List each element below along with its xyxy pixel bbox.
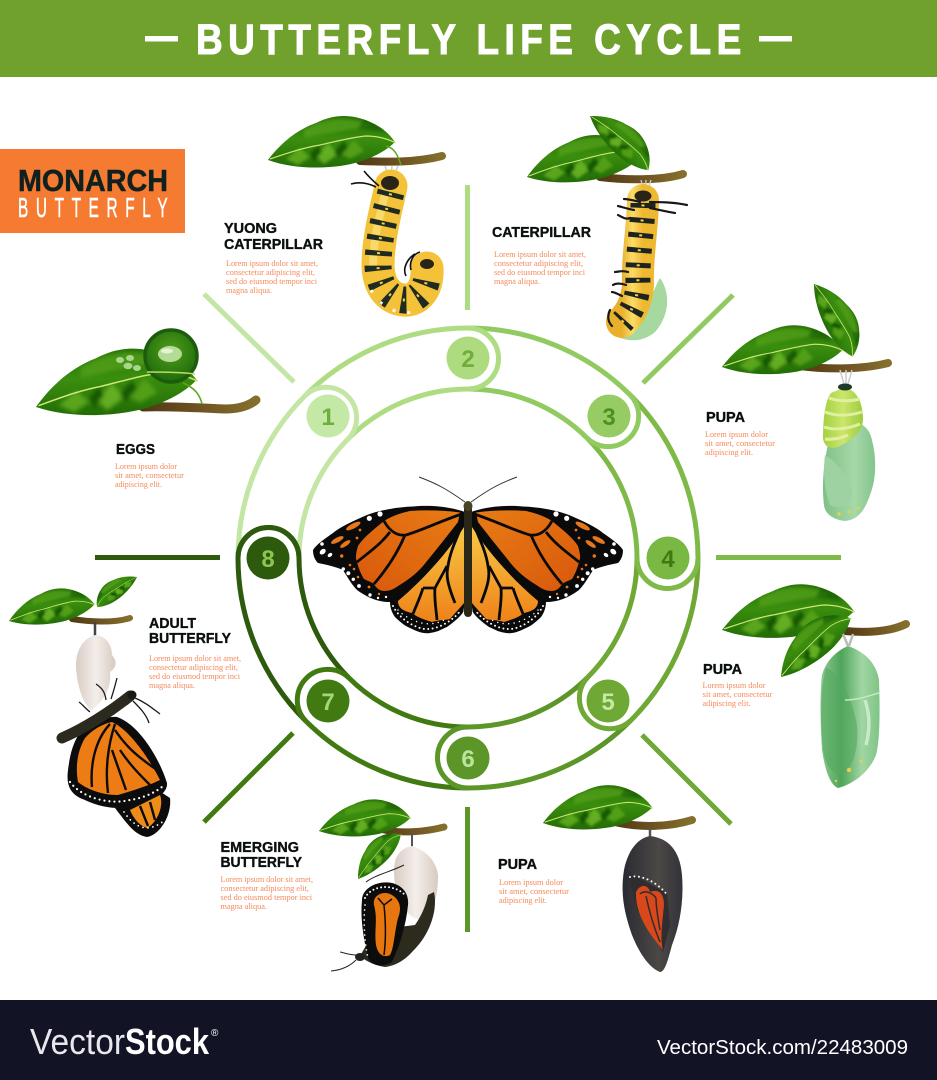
stage number badges: 6 — [461, 746, 475, 773]
badge: monarch butterfly: BUTTERFLY — [18, 192, 168, 223]
badge: monarch butterfly — [0, 149, 185, 233]
text: young caterpillar: YUONG — [224, 221, 277, 237]
text: adult butterfly: sed do eiusmod tempor inci — [149, 671, 241, 681]
text: emerging butterfly: sed do eiusmod tempor inci — [220, 892, 313, 902]
text: pupa stage 5 — [702, 662, 773, 708]
text: pupa stage 4: Lorem ipsum dolor — [705, 429, 768, 439]
stage number badges: 4 — [661, 546, 675, 573]
text: eggs: EGGS — [116, 442, 155, 458]
stage number badges: 3 — [602, 404, 616, 431]
redraw cap of segment 8 over segment 1 — [238, 528, 299, 558]
text: eggs: Lorem ipsum dolor — [115, 461, 177, 471]
text: adult butterfly: ADULT — [149, 616, 196, 632]
stage 1: leaf with eggs — [35, 330, 256, 417]
stage 3: caterpillar forming chrysalis — [526, 99, 687, 340]
spoke dividers — [95, 185, 841, 932]
text: young caterpillar: Lorem ipsum dolor sit amet, — [226, 258, 318, 268]
ring segment 2 — [305, 328, 498, 438]
ring segment 5 — [579, 558, 698, 729]
ring segment 3 — [468, 328, 639, 447]
header banner with title: BUTTERFLY LIFE CYCLE — [196, 16, 741, 64]
text: pupa stage 6: Lorem ipsum dolor — [499, 877, 563, 887]
text: caterpillar: sed do eiusmod tempor inci — [494, 267, 586, 277]
badge: monarch butterfly: MONARCH — [18, 163, 168, 198]
text: adult butterfly: consectetur adipiscing elit, — [149, 662, 238, 672]
text: emerging butterfly: magna aliqua. — [220, 901, 267, 911]
text: pupa stage 6: sit amet, consectetur — [499, 886, 569, 896]
ring segment 6 — [437, 678, 631, 788]
text: adult butterfly: magna aliqua. — [149, 680, 195, 690]
stage number badges: 2 — [461, 346, 475, 373]
stage 2: young caterpillar — [268, 116, 442, 313]
footer watermark bar: ® — [211, 1028, 219, 1039]
ring segment 1 — [238, 387, 357, 558]
text: emerging butterfly: Lorem ipsum dolor sit amet, — [220, 874, 313, 884]
stage number badges: 5 — [601, 689, 615, 716]
text: pupa stage 5: Lorem ipsum dolor — [702, 680, 766, 690]
text: caterpillar: consectetur adipiscing elit, — [494, 258, 583, 268]
text: emerging butterfly: consectetur adipiscing elit, — [220, 883, 309, 893]
footer watermark bar: Stock — [125, 1021, 210, 1062]
footer watermark bar: VectorStock.com/22483009 — [657, 1037, 908, 1059]
stage 4: early green pupa — [722, 274, 888, 521]
text: pupa stage 4 — [705, 410, 775, 457]
stage number badges — [246, 336, 690, 780]
text: pupa stage 6: PUPA — [498, 857, 538, 873]
text: pupa stage 6: adipiscing elit. — [499, 895, 547, 905]
ring segment 7 — [297, 669, 468, 788]
text: young caterpillar — [224, 221, 324, 295]
text: emerging butterfly: EMERGING — [220, 840, 299, 856]
stage 5: green chrysalis — [722, 584, 906, 788]
text: young caterpillar: CATERPILLAR — [224, 237, 324, 253]
stage 6: dark chrysalis showing wing — [543, 785, 692, 972]
text: adult butterfly: BUTTERFLY — [149, 631, 231, 647]
text: adult butterfly — [149, 616, 241, 690]
text: young caterpillar: magna aliqua. — [226, 285, 272, 295]
text: caterpillar: CATERPILLAR — [492, 225, 592, 241]
text: young caterpillar: consectetur adipiscing elit, — [226, 267, 315, 277]
text: pupa stage 6 — [498, 857, 569, 905]
stage number badges: 8 — [261, 546, 275, 573]
ring segment 8 — [238, 528, 348, 721]
text: pupa stage 4: adipiscing elit. — [705, 447, 753, 457]
ring segment 4 — [588, 395, 698, 588]
text: pupa stage 4: PUPA — [706, 410, 746, 426]
header banner with title — [0, 0, 937, 77]
text: caterpillar: Lorem ipsum dolor sit amet, — [494, 249, 586, 259]
text: pupa stage 5: adipiscing elit. — [702, 698, 750, 708]
text: pupa stage 5: sit amet, consectetur — [702, 689, 773, 699]
text: eggs: sit amet, consectetur — [115, 470, 184, 480]
stage number badges: 1 — [321, 404, 335, 431]
text: pupa stage 4: sit amet, consectetur — [705, 438, 775, 448]
text: eggs: adipiscing elit. — [115, 479, 162, 489]
stage 7: emerging butterfly — [319, 799, 444, 971]
circular cycle diagram with numbered stages — [238, 328, 698, 788]
stage 8: adult butterfly on cocoon — [7, 565, 170, 837]
text: emerging butterfly — [220, 840, 313, 911]
stage number badges: 7 — [321, 689, 335, 716]
footer watermark bar — [0, 1000, 937, 1080]
text: young caterpillar: sed do eiusmod tempor inci — [226, 276, 318, 286]
text: caterpillar: magna aliqua. — [494, 276, 540, 286]
text: emerging butterfly: BUTTERFLY — [220, 855, 302, 871]
text: caterpillar — [492, 225, 592, 286]
text: adult butterfly: Lorem ipsum dolor sit amet, — [149, 653, 241, 663]
text: eggs — [115, 442, 184, 489]
central monarch butterfly — [313, 477, 623, 633]
footer watermark bar: Vector — [30, 1021, 125, 1062]
text: pupa stage 5: PUPA — [703, 662, 743, 678]
